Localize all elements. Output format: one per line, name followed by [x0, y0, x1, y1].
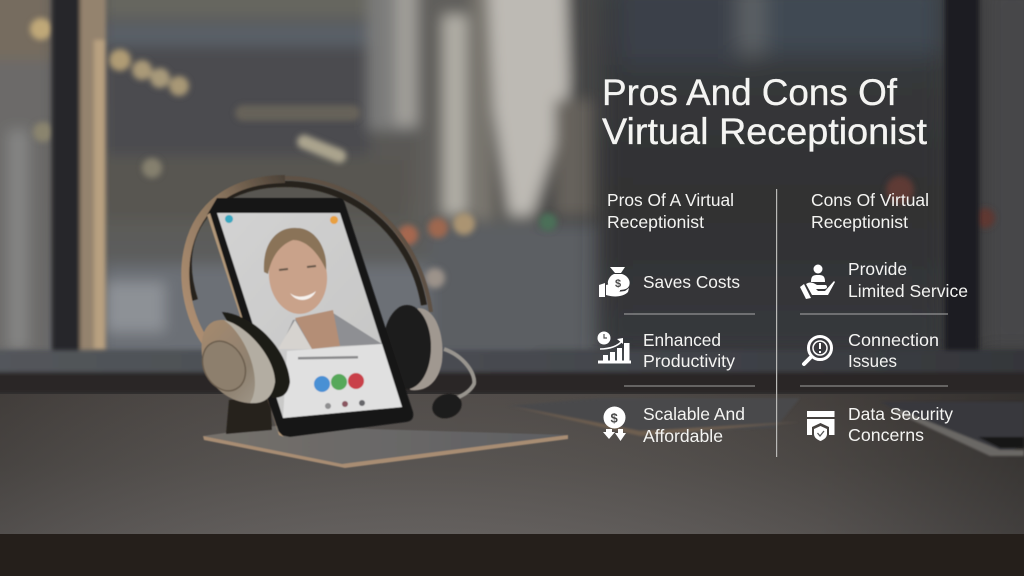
title: Pros And Cons Of [602, 72, 898, 113]
left ear cup [194, 312, 290, 403]
icon: dollar coin with down arrows [603, 406, 626, 441]
stand [226, 395, 272, 434]
window sill [0, 350, 1024, 394]
icon: browser window with shield [807, 411, 834, 441]
right ear cup [383, 305, 443, 390]
item: scalable and affordable [603, 404, 745, 446]
item: scalable and affordable: Scalable And [643, 404, 745, 424]
heading: cons: Cons Of Virtual [811, 190, 929, 210]
heading: pros: Receptionist [607, 212, 704, 232]
panel: cons [800, 190, 968, 445]
icon: money bag in hand: $ [615, 278, 621, 290]
item: saves costs: Saves Costs [643, 272, 740, 292]
item: connection issues: Issues [848, 351, 897, 371]
title [602, 72, 928, 152]
illustration: tablet with headset [185, 178, 568, 468]
heading: cons [811, 190, 929, 232]
item: connection issues [804, 330, 939, 371]
title: Virtual Receptionist [602, 111, 928, 152]
heading: pros [607, 190, 734, 232]
item: scalable and affordable: Affordable [643, 426, 723, 446]
item: saves costs [599, 267, 740, 297]
city view, left and centre [0, 0, 620, 365]
heading: pros: Pros Of A Virtual [607, 190, 734, 210]
window frame pillars [52, 0, 979, 360]
heading: cons: Receptionist [811, 212, 908, 232]
call panel [283, 344, 402, 418]
item: enhanced productivity [598, 330, 735, 371]
right-hand city view [600, 0, 1024, 355]
icon: clock and rising bar chart [598, 332, 631, 364]
item: provide limited service [800, 259, 968, 301]
item: data security concerns: Data Security [848, 404, 953, 424]
desk surface [0, 394, 1024, 534]
item: provide limited service: Provide [848, 259, 907, 279]
icon: magnifier with exclamation mark [804, 336, 832, 364]
base pad [203, 426, 568, 468]
bokeh lights [30, 18, 995, 288]
item: data security concerns [807, 404, 953, 445]
item: connection issues: Connection [848, 330, 939, 350]
headset band, behind tablet [185, 178, 431, 348]
icon: money bag in hand [599, 267, 630, 297]
item: enhanced productivity: Productivity [643, 351, 735, 371]
desk front edge [0, 534, 1024, 576]
icon: dollar coin with down arrows: $ [610, 410, 618, 426]
item: provide limited service: Limited Service [848, 281, 968, 301]
papers on the desk [506, 398, 1024, 456]
receptionist portrait [264, 228, 382, 349]
panel: pros [598, 190, 755, 446]
microphone boom [429, 349, 474, 422]
item: enhanced productivity: Enhanced [643, 330, 721, 350]
icon: person on open hand [800, 264, 835, 299]
item: data security concerns: Concerns [848, 425, 924, 445]
screen [217, 213, 402, 418]
tablet [207, 198, 413, 437]
column divider [776, 189, 777, 457]
